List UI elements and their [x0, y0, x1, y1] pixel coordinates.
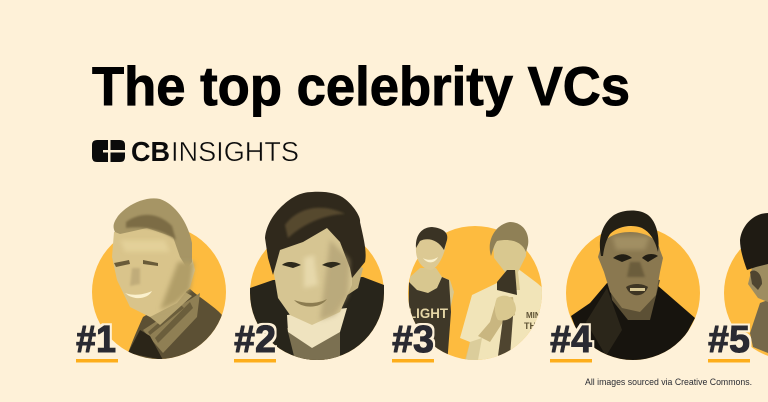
rank number: #3 — [392, 319, 434, 361]
portrait #5 — [724, 213, 768, 360]
person: man in brown jacket — [112, 198, 222, 360]
circle backdrop — [92, 225, 226, 359]
logo wordmark: INSIGHTS: INSIGHTS — [171, 136, 299, 167]
portrait #3 — [408, 222, 545, 365]
underline — [708, 359, 750, 362]
icon: CB Insights mark — [92, 140, 125, 162]
circle backdrop — [566, 226, 700, 360]
circle backdrop — [250, 226, 384, 360]
circle backdrop — [408, 226, 542, 360]
person: partial figure at the page edge — [740, 213, 768, 353]
portrait #2 — [250, 192, 384, 365]
rank label #2 — [234, 319, 276, 362]
shirt lettering: TH — [524, 321, 536, 331]
rank label #5 — [708, 319, 750, 362]
person: man in black jacket — [571, 210, 695, 365]
underline — [392, 359, 434, 362]
underline — [550, 359, 592, 362]
portrait #1 — [92, 198, 226, 360]
circle backdrop — [724, 226, 768, 360]
title: The top celebrity VCs — [92, 55, 630, 117]
underline — [76, 359, 118, 362]
rank label #3 — [392, 319, 434, 362]
logo wordmark: CB: CB — [131, 136, 170, 167]
image source note: All images sourced via Creative Commons. — [585, 377, 752, 388]
rank label #1 — [76, 319, 118, 362]
rank number: #1 — [76, 319, 116, 361]
rank number: #2 — [234, 319, 276, 361]
person: man with dark hair and jacket — [250, 192, 384, 365]
shirt lettering: LIGHT — [408, 305, 448, 321]
person: man with microphone — [460, 222, 545, 365]
person: man in tank top — [408, 227, 454, 365]
logo: CB Insights — [92, 136, 299, 167]
rank number: #5 — [708, 319, 750, 361]
shirt lettering: MIN — [526, 311, 541, 320]
rank label #4 — [550, 319, 592, 362]
underline — [234, 359, 276, 362]
portrait #4 — [566, 210, 700, 365]
rank number: #4 — [550, 319, 592, 361]
